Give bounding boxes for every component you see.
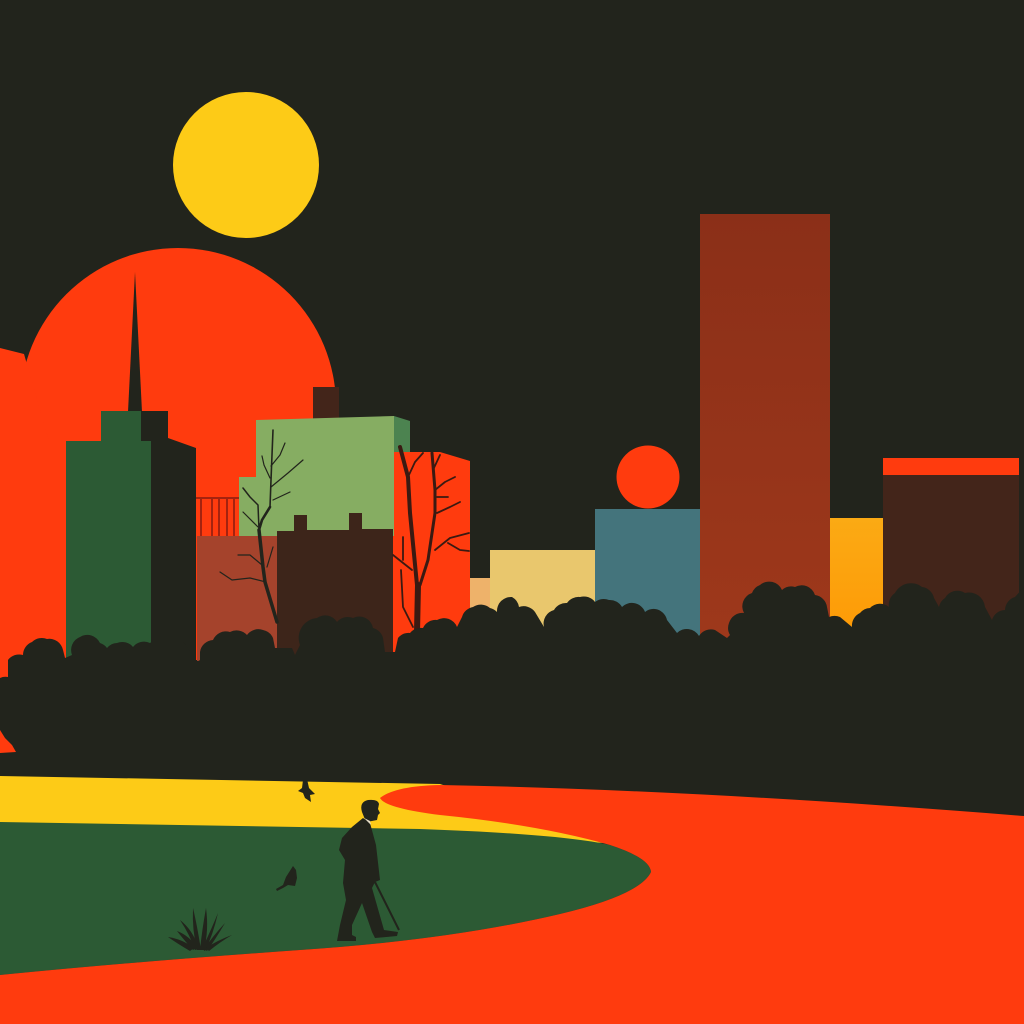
building: dark brown block with chimneys (277, 513, 393, 660)
building: pale yellow block (490, 550, 595, 640)
building: terracotta low block (197, 536, 277, 661)
icon: yellow moon (173, 92, 319, 238)
shirt collar (364, 818, 371, 825)
building: small rooftop block (313, 387, 339, 419)
building: dark brown right block with red cap (883, 458, 1019, 625)
cane (375, 882, 399, 930)
building: tall rust tower (700, 214, 830, 644)
bare tree: right (393, 447, 469, 632)
bird: flying on yellow band (298, 779, 315, 802)
railing (196, 498, 239, 536)
building: red right block (394, 452, 470, 650)
icon: small red sun (616, 446, 680, 508)
large red sun and left red wall (0, 248, 400, 690)
bird: on lawn (276, 866, 297, 891)
man with cane (337, 800, 399, 941)
treeline silhouette (0, 582, 1024, 830)
head (361, 800, 380, 822)
icon: agave plant (168, 908, 232, 951)
green lawn (0, 822, 651, 975)
building: light green block (239, 416, 410, 536)
body and legs (337, 818, 398, 941)
building: orange block (830, 518, 883, 638)
yellow path band (0, 776, 612, 843)
building: teal block (595, 509, 700, 649)
building: green tower (66, 411, 196, 660)
red path (0, 785, 1024, 1024)
red glimpse at left edge (0, 730, 16, 753)
spire (128, 272, 142, 412)
building: peach block (470, 578, 494, 628)
bare tree: left (220, 430, 303, 622)
